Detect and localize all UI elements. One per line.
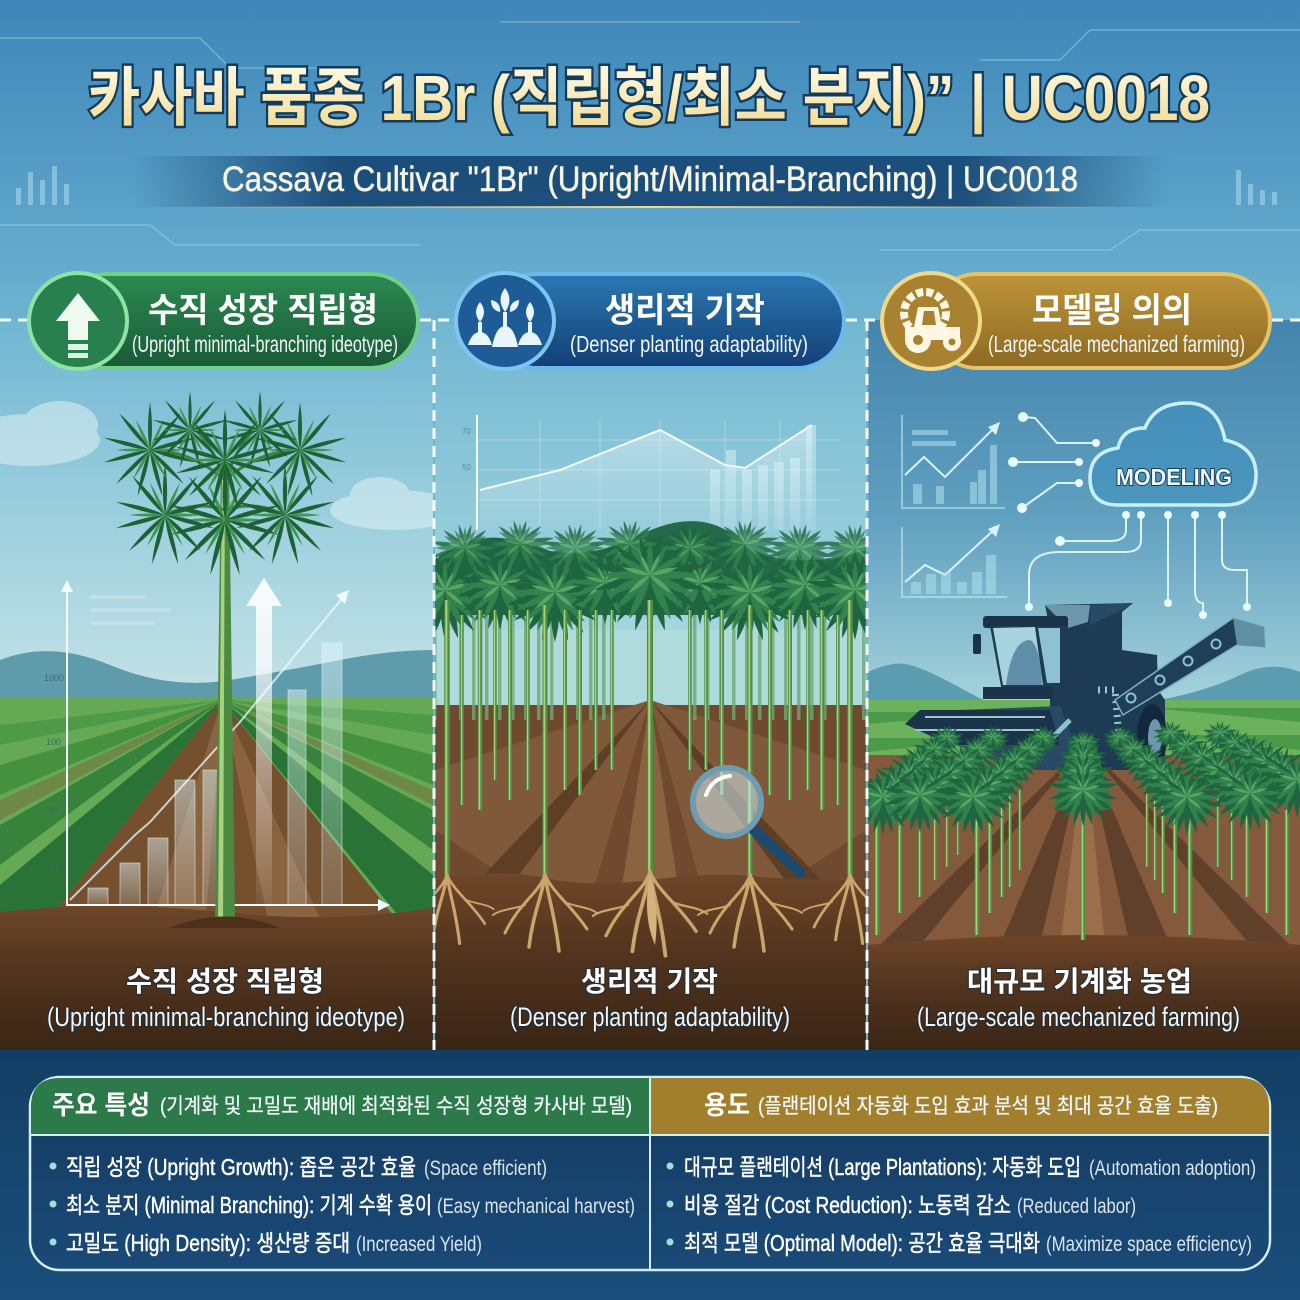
caption: upright ideotype	[47, 966, 405, 1032]
hills	[868, 664, 1300, 700]
crop row left 3	[936, 725, 1060, 834]
caption: upright ideotype: 수직 성장 직립형	[126, 966, 324, 997]
header: key traits: (기계화 및 고밀도 재배에 최적화된 수직 성장형 카사바 모델)	[160, 1095, 632, 1118]
list: uses: (Maximize space efficiency)	[1046, 1233, 1252, 1256]
growth chart overlay: 80	[48, 805, 58, 815]
soil	[0, 906, 433, 1050]
physiology chart: 50	[462, 463, 471, 472]
list: key traits: (Increased Yield)	[356, 1233, 482, 1256]
caption: mechanized farming: 대규모 기계화 농업	[967, 966, 1192, 997]
cloud: modeling: MODELING	[1116, 464, 1232, 490]
tree	[103, 391, 347, 928]
list: uses: 비용 절감 (Cost Reduction): 노동력 감소	[684, 1192, 1011, 1218]
crop row right 2	[1153, 721, 1287, 830]
physiology chart	[462, 415, 840, 530]
circuit lines	[1008, 412, 1251, 619]
pill header: modeling: 모델링 의의	[1032, 292, 1192, 330]
panel: upright ideotype scene	[0, 356, 433, 1050]
rear stems	[435, 610, 610, 720]
canopy	[435, 520, 866, 642]
caption: upright ideotype: (Upright minimal-branching ideotype)	[47, 1002, 405, 1032]
pill header: physiology	[456, 273, 844, 369]
list: key traits: 고밀도 (High Density): 생산량 증대	[66, 1230, 350, 1256]
foreground stems	[444, 600, 853, 880]
pill header: upright: 수직 성장 직립형	[148, 292, 378, 330]
panel: dense planting scene	[435, 357, 866, 1050]
subtitle band	[130, 156, 1170, 208]
crop row left 2	[883, 725, 1010, 832]
pill header: modeling	[882, 273, 1270, 369]
physiology chart: 70	[462, 427, 471, 436]
caption: mechanized farming	[917, 966, 1240, 1032]
pill header: upright	[29, 273, 418, 369]
header: key traits: 주요 특성	[52, 1090, 150, 1120]
analytics charts	[902, 415, 1007, 597]
list: key traits: (Easy mechanical harvest)	[437, 1195, 635, 1218]
growth chart overlay: 30	[48, 863, 58, 873]
caption: denser planting: (Denser planting adaptability)	[510, 1002, 790, 1032]
list: uses	[666, 1154, 1256, 1256]
pill header: physiology: (Denser planting adaptability)	[570, 331, 808, 357]
field rows	[0, 697, 433, 937]
growth chart overlay	[44, 580, 390, 911]
growth chart overlay: 1000	[44, 673, 64, 683]
subtitle band: Cassava Cultivar "1Br" (Upright/Minimal-Branching) | UC0018	[222, 160, 1078, 199]
list: uses: 최적 모델 (Optimal Model): 공간 효율 극대화	[684, 1230, 1040, 1256]
icon: tractor and gear	[882, 273, 980, 369]
soil	[435, 701, 866, 884]
underground soil	[435, 873, 866, 1050]
icon: up arrow	[29, 273, 127, 369]
magnifying glass icon	[693, 768, 800, 872]
panel: summary table	[30, 1077, 1270, 1270]
stems	[875, 790, 1289, 940]
harvester	[905, 603, 1265, 770]
roots	[400, 872, 897, 956]
pill header: physiology: 생리적 기작	[605, 292, 765, 330]
crop row right 1	[1103, 725, 1224, 834]
list: key traits: (Space efficient)	[424, 1157, 547, 1180]
crop row right 3	[1203, 721, 1300, 818]
list: key traits: 최소 분지 (Minimal Branching): 기계 수확 용이	[66, 1192, 432, 1218]
background haze	[436, 630, 866, 646]
crop row center	[1047, 729, 1119, 826]
decorative circuit lines and bar glyphs in header	[0, 22, 1300, 250]
list: uses: (Reduced labor)	[1017, 1195, 1136, 1218]
pill header: upright: (Upright minimal-branching ideotype)	[132, 331, 398, 357]
header: key traits	[31, 1078, 650, 1135]
header: uses	[650, 1078, 1269, 1135]
scene captions	[47, 966, 1240, 1032]
field stripes	[868, 700, 1300, 755]
caption: denser planting: 생리적 기작	[581, 966, 718, 997]
large growth arrow	[246, 578, 282, 905]
crop row left 1	[868, 726, 964, 834]
header: uses: (플랜테이션 자동화 도입 효과 분석 및 최대 공간 효율 도출)	[758, 1095, 1218, 1118]
panel: mechanized farming scene	[846, 320, 1300, 1050]
crop rows	[846, 721, 1300, 834]
growth chart overlay: 100	[46, 737, 61, 747]
soil	[868, 745, 1300, 1050]
caption: denser planting	[510, 966, 790, 1032]
list: uses: (Automation adoption)	[1089, 1157, 1256, 1180]
icon: seedlings	[456, 273, 554, 369]
hills	[0, 650, 433, 697]
dashed panel dividers	[0, 320, 1300, 1050]
clouds	[0, 401, 460, 530]
list: key traits	[50, 1154, 635, 1256]
cloud: modeling	[1090, 403, 1256, 505]
bottom section background	[0, 1050, 1300, 1300]
list: uses: 대규모 플랜테이션 (Large Plantations): 자동화 도입	[684, 1154, 1081, 1180]
header: uses: 용도	[704, 1090, 750, 1120]
list: key traits: 직립 성장 (Upright Growth): 좁은 공간 효율	[66, 1154, 416, 1180]
